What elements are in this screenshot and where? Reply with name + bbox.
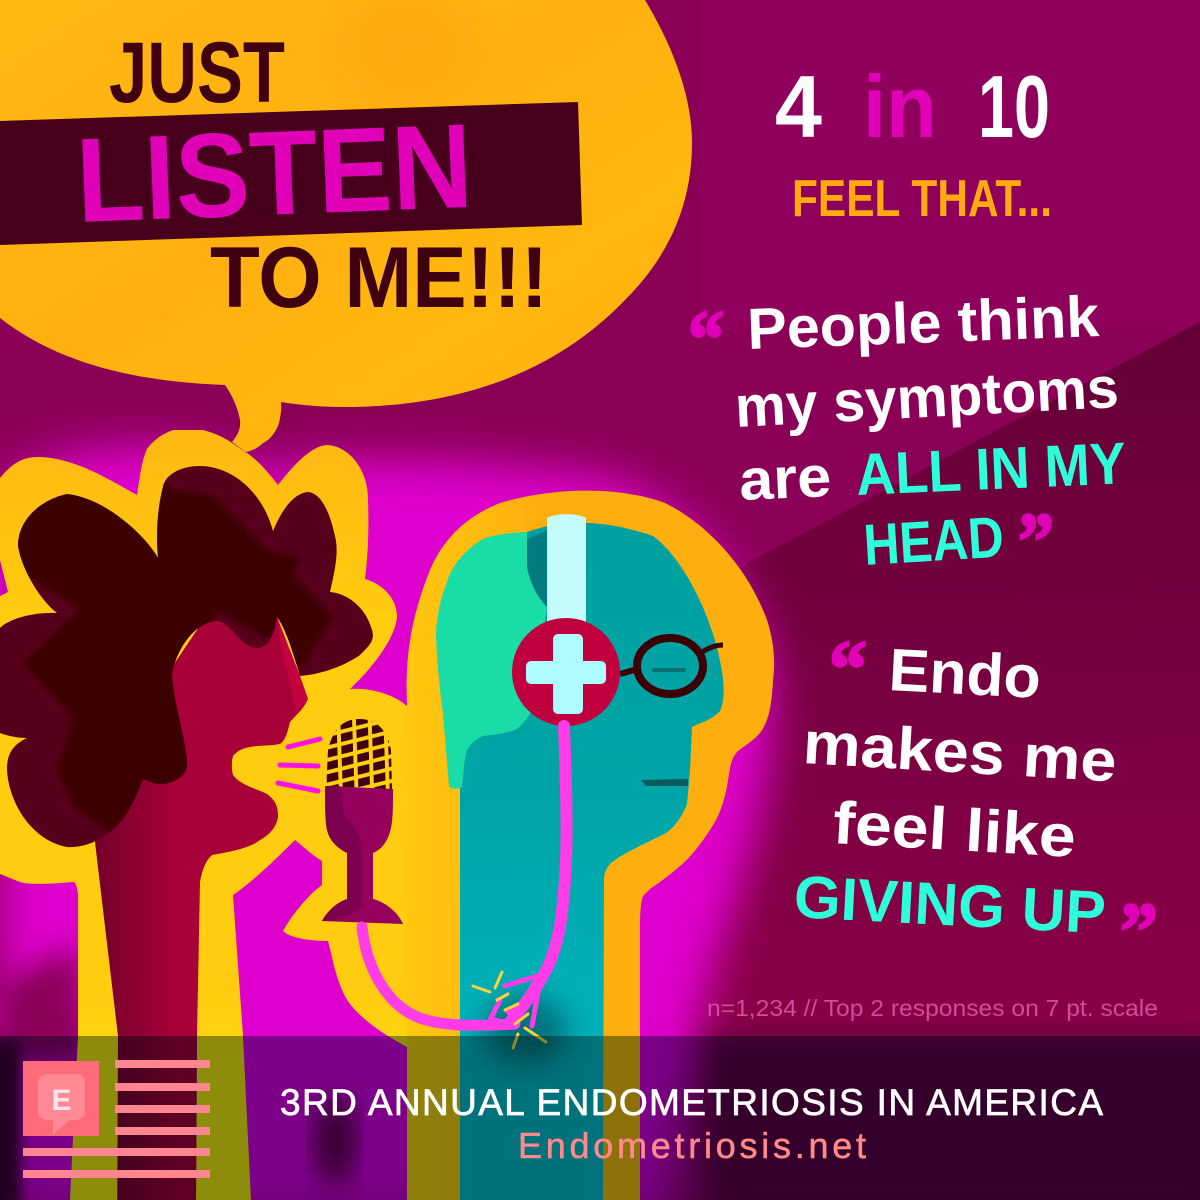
feel that: FEEL THAT... [792,170,1052,228]
speech bubble [0,0,692,452]
earphone with cross [512,618,620,726]
headband [547,514,586,630]
footer url: Endometriosis.net [518,1125,866,1166]
microphone [322,719,403,924]
quote 1: ” [1018,498,1054,586]
quote 1: ALL IN MY [855,430,1127,508]
left figure: face and neck [90,600,308,1200]
right figure outline [407,491,774,1200]
quote 1: HEAD [862,505,1006,578]
stat: 4 in 10 [775,57,1050,156]
footer title: 3RD ANNUAL ENDOMETRIOSIS IN AMERICA [280,1082,1103,1123]
quote 1: my symptoms [733,355,1120,440]
heading: to me: TO ME!!! [210,230,548,326]
source note: n=1,234 // Top 2 responses on 7 pt. scale [707,995,1158,1021]
banner [0,102,582,245]
logo icon [23,1061,99,1136]
quote 1: “ [688,296,724,384]
stat: 4 in 10: 10 [978,57,1050,156]
glasses [620,638,723,694]
footer band [0,1036,1200,1200]
stat: 4 in 10: 4 [775,57,822,156]
right figure: head and body [440,523,724,1200]
left figure outline [0,430,460,1200]
endo cable [362,726,567,1026]
quote 1: People think [746,284,1101,362]
quote 1: are [738,444,832,513]
mouth [641,779,688,786]
quote 2 [792,626,1158,976]
sparks [473,972,546,1048]
left figure: hair [0,466,373,847]
green hair [436,532,547,789]
heading: listen: LISTEN [74,99,475,248]
quote 2: “ [829,626,867,714]
quote 1 [688,284,1127,586]
quote 2: Endo [887,636,1043,711]
magenta sliver [0,560,8,596]
stat: 4 in 10: in [863,57,937,156]
heading: just: JUST [109,25,285,121]
flag stripes [23,1060,210,1178]
speech lines [278,739,320,791]
quote 2: makes me [801,709,1119,795]
quote 2: feel like [831,789,1078,870]
quote 2: ” [1120,888,1158,976]
quote 2: GIVING UP [792,863,1107,946]
logo icon: E [51,1084,72,1117]
